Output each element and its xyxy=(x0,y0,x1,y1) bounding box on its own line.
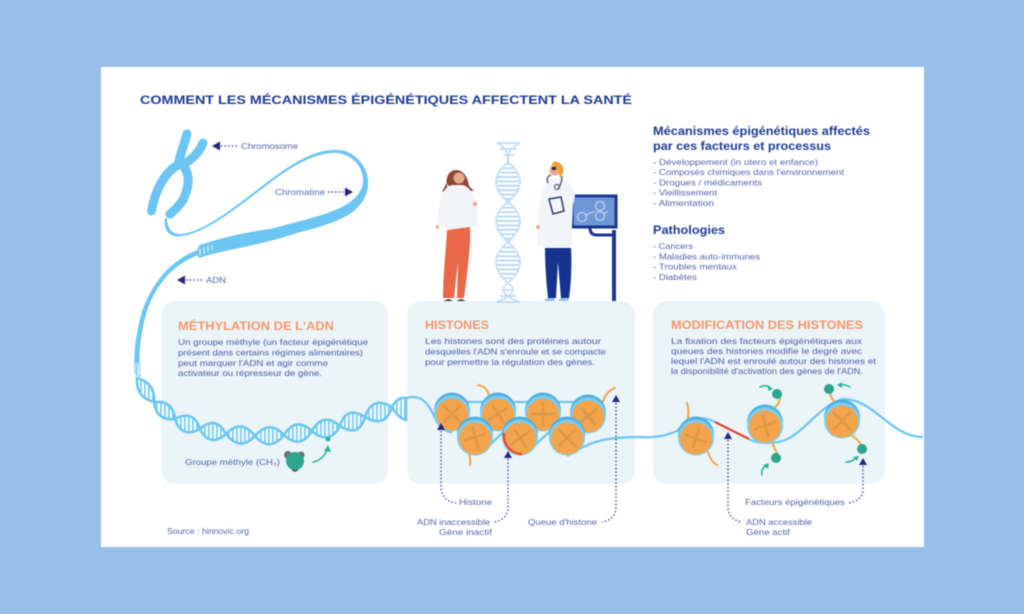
illustration: monitor xyxy=(572,196,616,301)
text: histones xyxy=(425,336,606,367)
list: factors: - Drogues / médicaments xyxy=(653,178,762,188)
callout: ADN inaccessible: Gène inactif xyxy=(439,527,493,537)
nucleosome: modified 3 xyxy=(824,400,860,438)
label: ADN xyxy=(177,275,226,285)
illustration: doctor xyxy=(536,162,575,301)
nucleosome: histone 5 xyxy=(457,416,493,456)
panel: méthylation de l'ADN xyxy=(161,301,388,484)
nucleosome: modified 1 xyxy=(678,416,714,456)
DNA double helix xyxy=(134,362,406,444)
label: chromatine: Chromatine xyxy=(275,187,325,197)
label: chromatine xyxy=(275,187,353,197)
text: modification: lequel l'ADN est enroulé autour des histones et xyxy=(671,356,877,366)
label: ADN: ADN xyxy=(206,275,226,285)
heading: histones: HISTONES xyxy=(425,320,489,332)
label: chromosome xyxy=(212,141,298,151)
nucleosome: histone 4 xyxy=(570,394,606,434)
panel: histones xyxy=(407,301,635,484)
list: pathologies xyxy=(653,241,760,282)
text: modification xyxy=(671,336,877,376)
callout: facteurs épigénétiques: Facteurs épigénétiques xyxy=(745,497,845,507)
list: factors: - Développement (in utero et enfance) xyxy=(653,157,818,167)
callout: histone: Histone xyxy=(459,497,492,507)
panel: modification des histones xyxy=(653,301,885,484)
callout: ADN accessible: ADN accessible xyxy=(746,517,812,527)
heading: mechanisms xyxy=(653,126,870,153)
arrow: methyl to DNA xyxy=(313,445,331,462)
epigenetic factors xyxy=(771,384,867,463)
text: méthylation xyxy=(178,337,368,378)
nucleosome: histone 7 xyxy=(549,416,585,456)
heading: pathologies: Pathologies xyxy=(653,225,725,237)
heading: modification: MODIFICATION DES HISTONES xyxy=(671,320,863,332)
text: méthylation: peut marquer l'ADN et agir comme xyxy=(178,358,328,368)
callout: ADN inaccessible xyxy=(417,451,512,537)
histone tails xyxy=(468,385,862,465)
callout: ADN accessible xyxy=(724,432,812,537)
text: histones: pour permettre la régulation des gènes. xyxy=(425,357,595,367)
icon: chromosome xyxy=(152,134,203,214)
text: histones: Les histones sont des protéines autour xyxy=(425,336,601,346)
label: groupe méthyle: Groupe méthyle (CH₃) xyxy=(185,457,280,467)
illustration: woman xyxy=(436,170,477,301)
callout: queue d'histone xyxy=(528,395,620,527)
text: méthylation: activateur ou répresseur de gène. xyxy=(178,368,322,378)
illustration: vertical DNA helix xyxy=(496,143,520,302)
list: pathologies: - Diabètes xyxy=(653,272,697,282)
nucleosome: histone 2 xyxy=(480,392,516,432)
DNA strand to helix xyxy=(134,250,199,363)
text: modification: la disponibilité d'activation des gènes de l'ADN. xyxy=(671,366,863,376)
callout: queue d'histone: Queue d'histone xyxy=(528,517,597,527)
callout: ADN accessible: Gène actif xyxy=(746,527,791,537)
text: méthylation: présent dans certains régimes alimentaires) xyxy=(178,348,363,358)
heading: méthylation: MÉTHYLATION DE L'ADN xyxy=(178,320,334,333)
list: pathologies: - Troubles mentaux xyxy=(653,262,738,272)
title: COMMENT LES MÉCANISMES ÉPIGÉNÉTIQUES AFFECTENT LA SANTÉ xyxy=(140,92,632,107)
red inaccessible DNA xyxy=(504,433,522,454)
nucleosome: histone 3 xyxy=(525,392,561,432)
text: méthylation: Un groupe méthyle (un facteur épigénétique xyxy=(178,337,368,347)
DNA through histones and on to right edge xyxy=(406,397,923,456)
label: chromosome: Chromosome xyxy=(241,141,298,151)
source: Source : hinnovic.org xyxy=(167,526,249,536)
nucleosome: modified 2 xyxy=(747,404,783,444)
list: factors: - Vieillissement xyxy=(653,188,718,198)
list: factors: - Composés chimiques dans l'environnement xyxy=(653,167,845,177)
list: factors: - Alimentation xyxy=(653,198,714,208)
heading: mechanisms: Mécanismes épigénétiques affectés xyxy=(653,126,870,138)
list: factors xyxy=(653,157,845,208)
right column: pathologies xyxy=(653,225,760,282)
heading: mechanisms: par ces facteurs et processus xyxy=(653,141,831,153)
callout: ADN inaccessible: ADN inaccessible xyxy=(417,517,490,527)
nucleosome: histone 1 xyxy=(434,392,470,432)
epigenetic factor arrows xyxy=(760,382,859,475)
nucleosome: histone 6 xyxy=(502,416,538,456)
list: pathologies: - Cancers xyxy=(653,241,693,251)
white card xyxy=(101,67,924,547)
chromatin fibre xyxy=(165,150,368,258)
text: histones: desquelles l'ADN s'enroule et se compacte xyxy=(425,346,606,356)
right column: mechanisms xyxy=(653,126,870,208)
methyl dot on DNA xyxy=(326,436,330,442)
list: pathologies: - Maladies auto-immunes xyxy=(653,252,760,262)
icon: methyl group xyxy=(284,451,304,472)
callout: facteurs épigénétiques xyxy=(745,458,867,507)
text: modification: queues des histones modifie le degré avec xyxy=(671,346,863,356)
red accessible DNA xyxy=(715,422,749,439)
text: modification: La fixation des facteurs épigénétiques aux xyxy=(671,336,863,346)
callout: histone xyxy=(437,423,492,507)
